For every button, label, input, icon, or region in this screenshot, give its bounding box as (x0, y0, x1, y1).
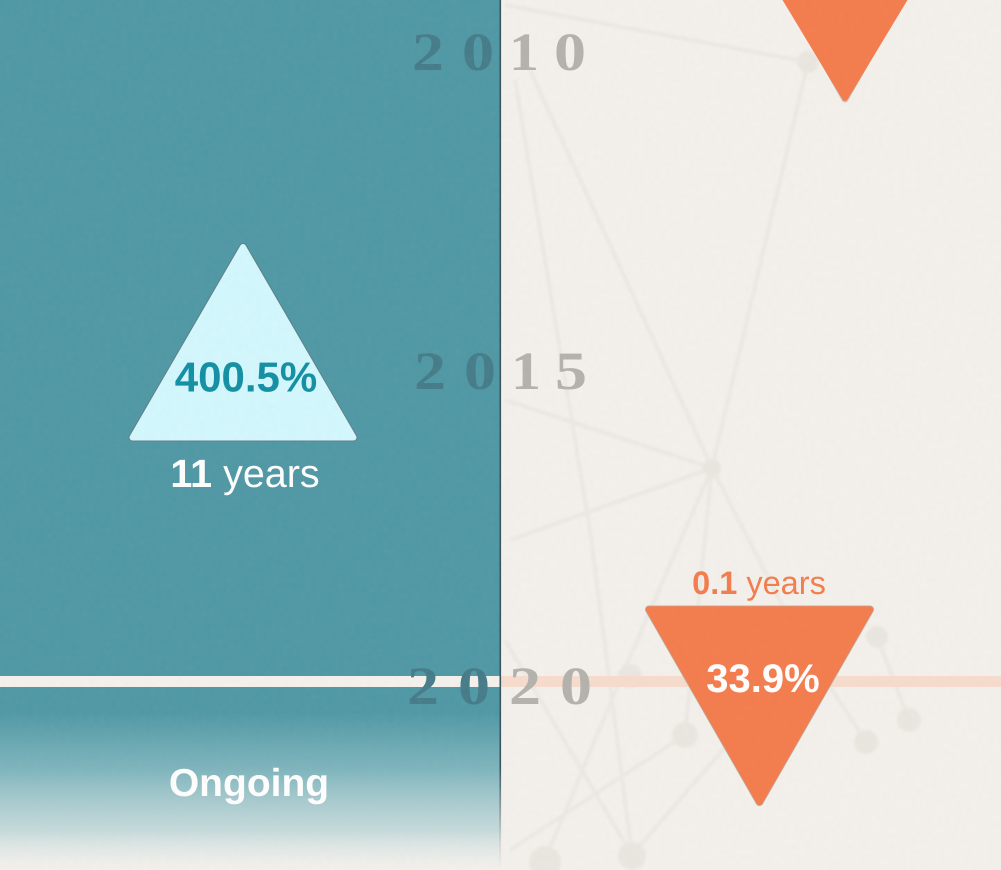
network nodes (529, 51, 921, 870)
year label 2015 (414, 341, 587, 401)
central axis line (500, 0, 501, 870)
duration: 11 years (170, 452, 320, 496)
year label 2020: 0 (458, 656, 490, 716)
year label 2010: 0 (554, 22, 586, 82)
year label 2020: 0 (560, 656, 592, 716)
left band at 2020 (0, 676, 500, 687)
faint network pattern (505, 5, 909, 860)
year label 2015: 0 (464, 341, 496, 401)
year label 2010: 0 (462, 22, 494, 82)
year label 2020: 2 (509, 656, 541, 716)
percent value: 33.9% (706, 657, 820, 701)
fall marker: 33.9% over 0.1 years (649, 565, 870, 802)
year label 2020: 2 (407, 656, 439, 716)
up triangle (132, 247, 354, 438)
year label 2020 (407, 656, 592, 716)
year label 2010: 1 (509, 22, 539, 82)
year label 2015: 1 (511, 341, 541, 401)
teal left panel (0, 0, 500, 870)
percent value: 400.5% (175, 354, 317, 400)
down triangle (649, 610, 870, 802)
duration: 0.1 years (692, 565, 826, 601)
year label 2015: 5 (555, 341, 587, 401)
orange down triangle, top, cropped (780, 0, 910, 99)
year label 2010: 2 (412, 22, 444, 82)
rise marker: 400.5% over 11 years (132, 247, 354, 496)
right band at 2020 (501, 676, 1001, 687)
year label 2010 (412, 22, 586, 82)
ongoing label: Ongoing (169, 762, 329, 805)
year label 2015: 2 (414, 341, 446, 401)
